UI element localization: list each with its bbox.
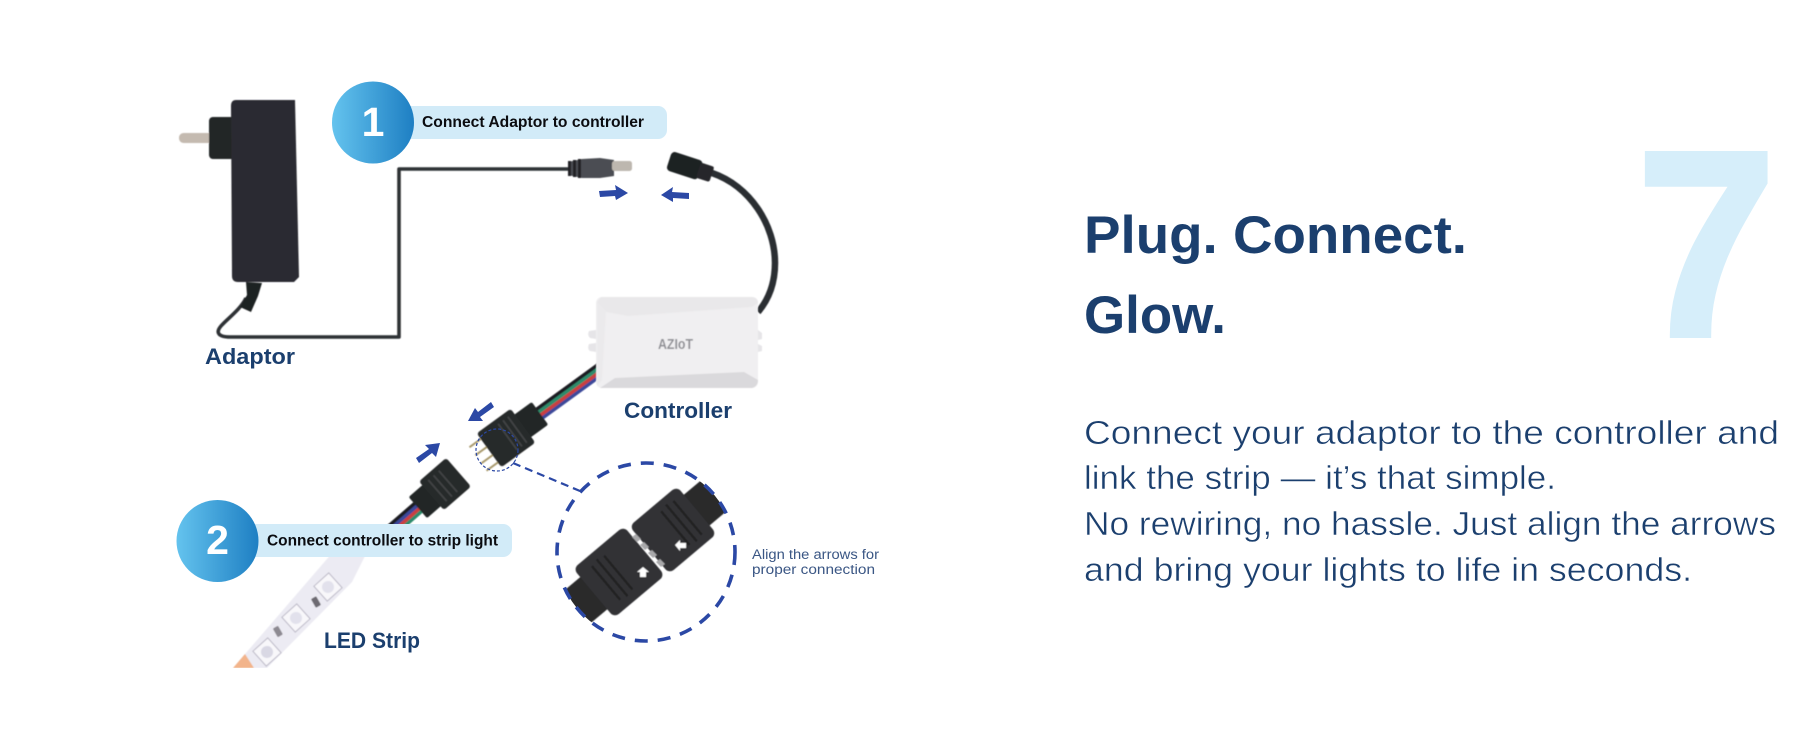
icon: LED strip bbox=[233, 552, 367, 668]
callout text: align the arrows: proper connection bbox=[752, 562, 875, 578]
label: Adaptor: Adaptor bbox=[205, 344, 295, 369]
body text: Connect your adaptor to the controller and bbox=[1084, 415, 1779, 452]
step 1 callout: 1 bbox=[362, 99, 384, 145]
body text bbox=[1084, 415, 1779, 589]
big number 7: 7 bbox=[1637, 98, 1776, 391]
title bbox=[1084, 206, 1467, 345]
title: Glow. bbox=[1084, 286, 1226, 345]
title: Plug. Connect. bbox=[1084, 206, 1467, 265]
text: controller brand: AZIoT bbox=[658, 336, 693, 353]
arrow: controller connector moves down-left bbox=[468, 402, 494, 421]
icon: RGB wires from controller to male connector bbox=[465, 336, 636, 476]
body text: link the strip — it’s that simple. bbox=[1084, 460, 1556, 497]
step 1 callout: Connect Adaptor to controller bbox=[422, 114, 644, 131]
icon: DC socket with cable to controller bbox=[666, 151, 775, 312]
step 2 callout: Connect controller to strip light bbox=[267, 532, 498, 550]
callout text: align the arrows: Align the arrows for bbox=[752, 547, 879, 563]
label: Controller: Controller bbox=[624, 398, 732, 423]
body text: and bring your lights to life in seconds. bbox=[1084, 552, 1692, 589]
step 1 callout bbox=[332, 82, 667, 164]
arrow: socket moves left bbox=[661, 187, 689, 202]
panel: controller box bbox=[588, 297, 762, 388]
icon: magnified joined connectors bbox=[566, 481, 724, 623]
callout text: align the arrows bbox=[752, 547, 879, 578]
icon: female strip connector with wires bbox=[363, 458, 471, 559]
step 2 callout bbox=[176, 500, 512, 582]
callout: small dashed focus circle and leader bbox=[476, 429, 580, 491]
callout: big dashed zoom circle bbox=[557, 463, 735, 641]
step 2 callout: 2 bbox=[206, 517, 229, 563]
icon: power adaptor with cable and plug bbox=[179, 100, 632, 337]
arrow: strip connector moves up-right bbox=[416, 443, 440, 463]
label: LED Strip: LED Strip bbox=[324, 628, 420, 653]
arrow: plug moves right bbox=[599, 185, 628, 200]
body text: No rewiring, no hassle. Just align the arrows bbox=[1084, 506, 1776, 543]
